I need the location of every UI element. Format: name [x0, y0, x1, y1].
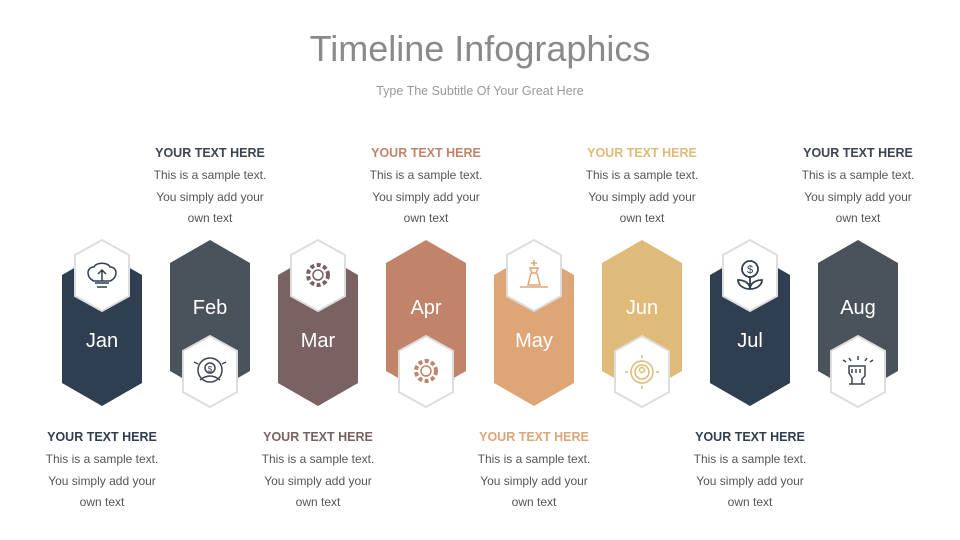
text: May: own text	[512, 495, 556, 509]
text: Aug: own text	[836, 211, 880, 225]
Jul column: $	[747, 264, 753, 276]
text: Aug: This is a sample text.	[802, 168, 914, 182]
text: Aug: You simply add your	[804, 190, 912, 204]
text: Jan: own text	[80, 495, 124, 509]
text: Feb: YOUR TEXT HERE	[155, 146, 265, 160]
Mar column: Mar	[301, 330, 336, 352]
title: Timeline Infographics	[310, 28, 650, 69]
text: Apr: YOUR TEXT HERE	[371, 146, 481, 160]
Jun column: Jun	[626, 297, 658, 319]
text: Feb: You simply add your	[156, 190, 264, 204]
text: Jul: This is a sample text.	[694, 452, 806, 466]
text: Apr: You simply add your	[372, 190, 480, 204]
Feb column	[170, 240, 250, 407]
text: Jul: YOUR TEXT HERE	[695, 430, 805, 444]
text: Apr: own text	[404, 211, 448, 225]
text: May: YOUR TEXT HERE	[479, 430, 589, 444]
May column	[494, 240, 574, 406]
text: May: This is a sample text.	[478, 452, 590, 466]
text: Mar: YOUR TEXT HERE	[263, 430, 373, 444]
subtitle: Type The Subtitle Of Your Great Here	[376, 84, 584, 98]
Feb column: $	[208, 365, 213, 374]
text: Jul: You simply add your	[696, 474, 804, 488]
text: Jan	[46, 430, 158, 509]
text: Mar: You simply add your	[264, 474, 372, 488]
Feb column: Feb	[193, 297, 227, 319]
text: May: You simply add your	[480, 474, 588, 488]
Aug column: Aug	[840, 297, 876, 319]
Jan column	[62, 240, 142, 406]
Mar column	[278, 240, 358, 406]
text: Jun: This is a sample text.	[586, 168, 698, 182]
text: Mar: own text	[296, 495, 340, 509]
text: Aug	[802, 146, 914, 225]
text: Jul: own text	[728, 495, 772, 509]
text: Feb: This is a sample text.	[154, 168, 266, 182]
text: Jan: This is a sample text.	[46, 452, 158, 466]
text: Jan: YOUR TEXT HERE	[47, 430, 157, 444]
text: Feb: own text	[188, 211, 232, 225]
text: Jun	[586, 146, 698, 225]
text: Mar: This is a sample text.	[262, 452, 374, 466]
Aug column	[818, 240, 898, 407]
text: Jun: You simply add your	[588, 190, 696, 204]
text: Aug: YOUR TEXT HERE	[803, 146, 913, 160]
Jul column: Jul	[737, 330, 763, 352]
text: Jul	[694, 430, 806, 509]
text: Apr	[370, 146, 482, 225]
text: Jun: YOUR TEXT HERE	[587, 146, 697, 160]
text: Jun: own text	[620, 211, 664, 225]
Jun column	[602, 240, 682, 407]
Apr column	[386, 240, 466, 407]
Apr column: Apr	[410, 297, 442, 319]
text: Mar	[262, 430, 374, 509]
text: May	[478, 430, 590, 509]
May column: May	[515, 330, 553, 352]
text: Jan: You simply add your	[48, 474, 156, 488]
text: Apr: This is a sample text.	[370, 168, 482, 182]
Jul column	[710, 240, 790, 406]
Jan column: Jan	[86, 330, 118, 352]
text: Feb	[154, 146, 266, 225]
